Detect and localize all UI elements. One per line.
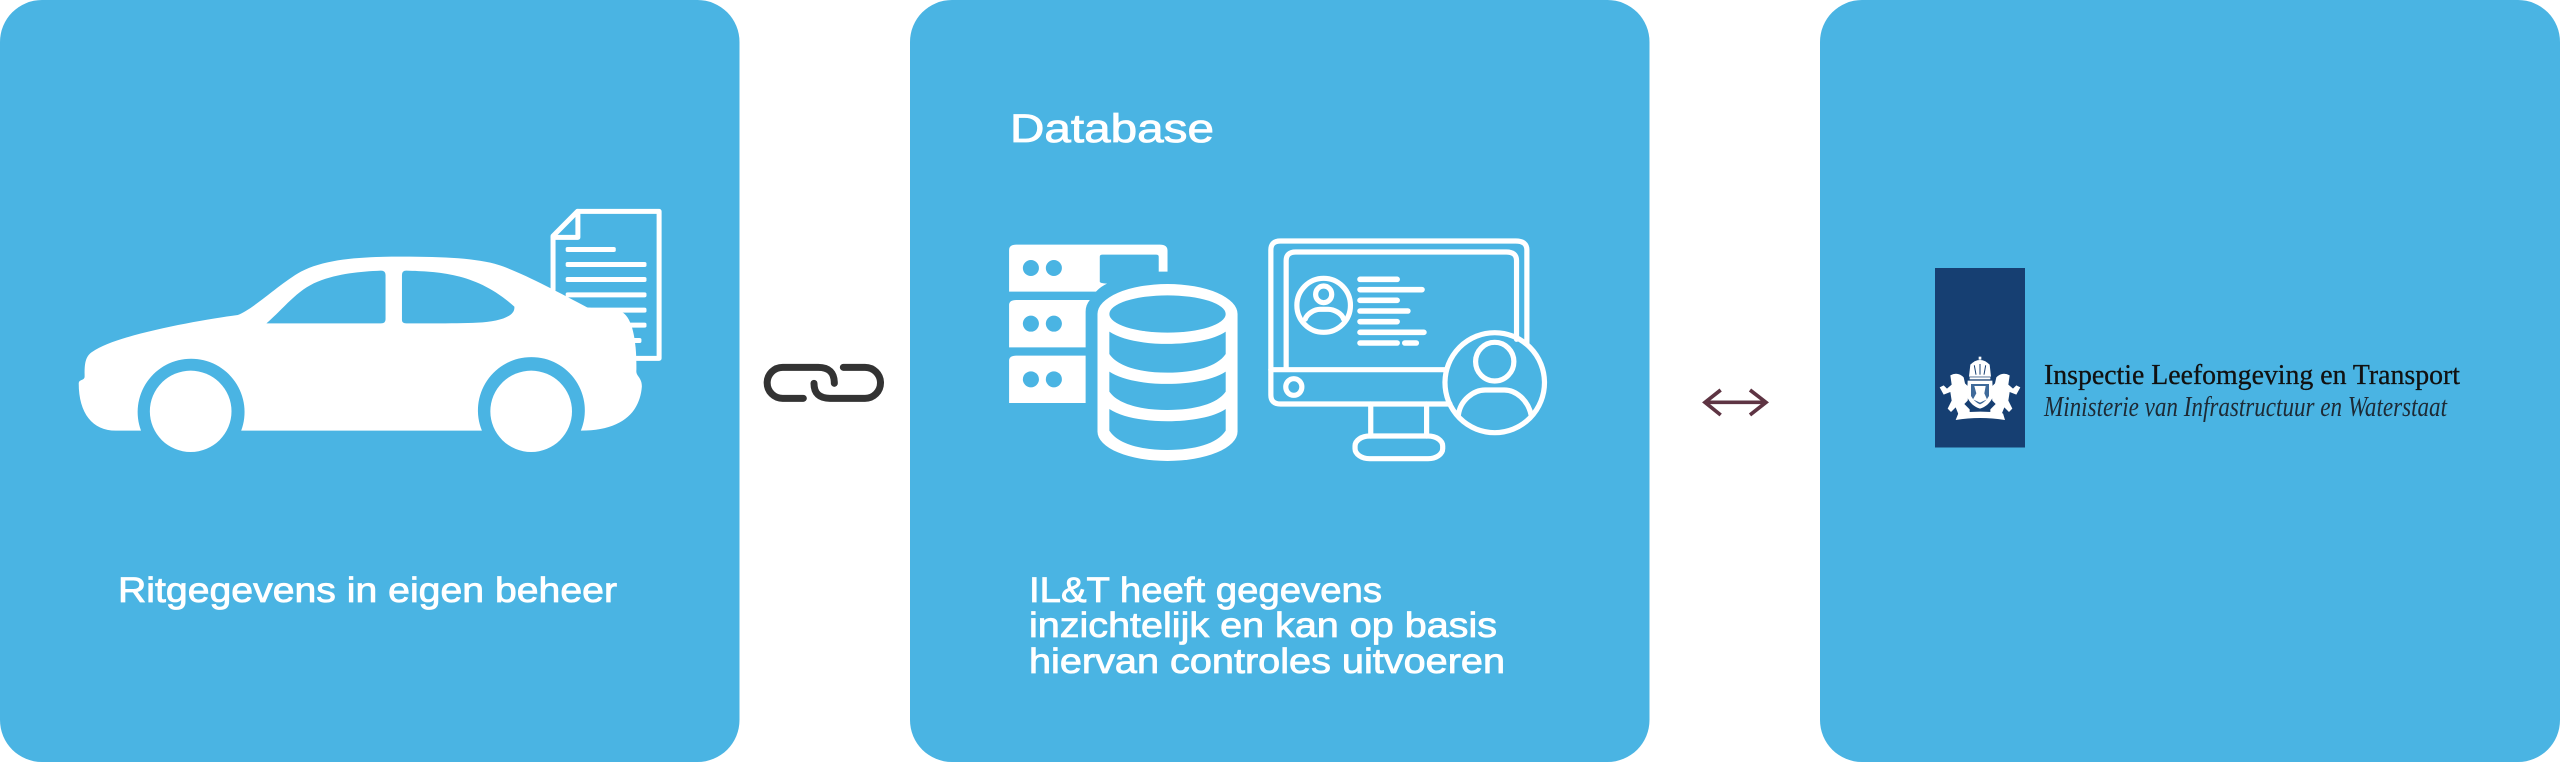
logo text: Ministerie van Infrastructuur en Waterstaat <box>2043 391 2448 423</box>
panel: inspectorate <box>1820 0 2560 762</box>
icon: document behind car <box>553 211 659 358</box>
logo: blue ribbon with coat of arms <box>1935 268 2025 448</box>
caption: ride data: Ritgegevens in eigen beheer <box>118 571 617 610</box>
icon: coat of arms <box>1940 357 2020 420</box>
caption: database <box>1029 571 1505 681</box>
caption: database: inzichtelijk en kan op basis <box>1029 606 1497 645</box>
heading: Database: Database <box>1010 107 1214 151</box>
icon: monitor with user profiles <box>1271 241 1544 459</box>
icon: servers and database <box>1009 245 1238 461</box>
panel: ride data <box>0 0 740 762</box>
icon: two-way arrow <box>1705 390 1766 415</box>
panel: database <box>910 0 1650 762</box>
caption: database: hiervan controles uitvoeren <box>1029 642 1505 681</box>
logo text: Inspectie Leefomgeving en Transport <box>2044 359 2460 391</box>
caption: database: IL&T heeft gegevens <box>1029 571 1382 610</box>
icon: chain link <box>767 367 880 398</box>
logo text <box>2043 359 2460 423</box>
icon: car <box>79 257 642 452</box>
